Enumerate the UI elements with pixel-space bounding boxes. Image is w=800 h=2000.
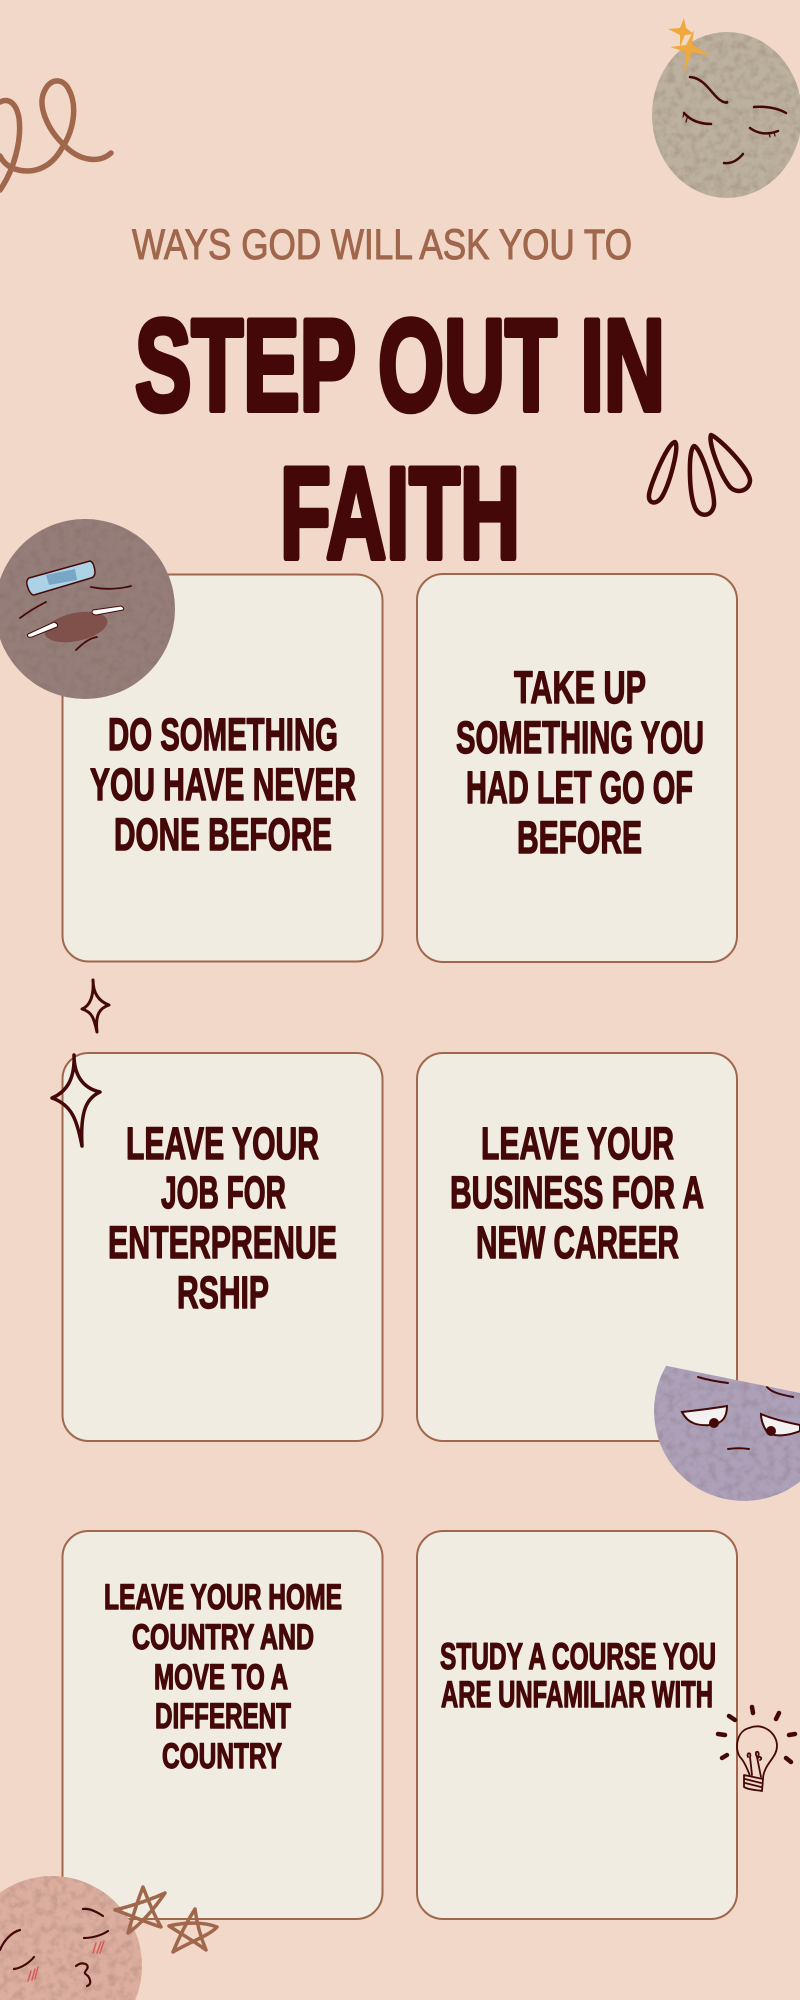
card 2: TAKE UP bbox=[514, 662, 646, 713]
subtitle: WAYS GOD WILL ASK YOU TO bbox=[132, 221, 632, 269]
card 5: COUNTRY AND bbox=[132, 1618, 314, 1657]
icon: large outline sparkle bbox=[52, 1055, 100, 1146]
swirl doodle bbox=[0, 81, 111, 190]
card 1: DONE BEFORE bbox=[114, 809, 332, 860]
card 5: MOVE TO A bbox=[154, 1658, 288, 1697]
card 3: JOB FOR bbox=[161, 1167, 286, 1218]
card 5: COUNTRY bbox=[162, 1737, 282, 1776]
card 4: LEAVE YOUR bbox=[481, 1118, 674, 1169]
card 2 bbox=[417, 574, 737, 962]
icon: bandage bbox=[27, 561, 95, 595]
face: purple half bbox=[654, 1366, 800, 1501]
icon: doodle stars bbox=[115, 1887, 217, 1952]
card 3 bbox=[62, 1053, 382, 1441]
card 1: YOU HAVE NEVER bbox=[90, 759, 356, 810]
card 4: NEW CAREER bbox=[476, 1217, 679, 1268]
card 2: BEFORE bbox=[517, 812, 642, 863]
card 3: LEAVE YOUR bbox=[126, 1118, 319, 1169]
card 4 bbox=[417, 1053, 737, 1441]
card 3: RSHIP bbox=[177, 1267, 269, 1318]
icon: three petals bbox=[649, 435, 750, 515]
card 3: ENTERPRENUE bbox=[108, 1217, 337, 1268]
icon: small outline sparkle bbox=[82, 980, 109, 1032]
card 1 bbox=[62, 574, 382, 962]
card 5: LEAVE YOUR HOME bbox=[104, 1578, 342, 1617]
card 1: DO SOMETHING bbox=[108, 709, 338, 760]
card 5: DIFFERENT bbox=[155, 1697, 291, 1736]
icon: light bulb bbox=[718, 1707, 795, 1791]
card 5 bbox=[62, 1531, 382, 1919]
title: FAITH bbox=[280, 440, 520, 586]
card 6 bbox=[417, 1531, 737, 1919]
title bbox=[135, 292, 665, 586]
face: pink kissing bbox=[0, 1876, 142, 2000]
icon: gold sparkles bbox=[668, 18, 710, 73]
face: bandaged bbox=[0, 519, 175, 699]
face: sleeping top right bbox=[652, 32, 800, 198]
